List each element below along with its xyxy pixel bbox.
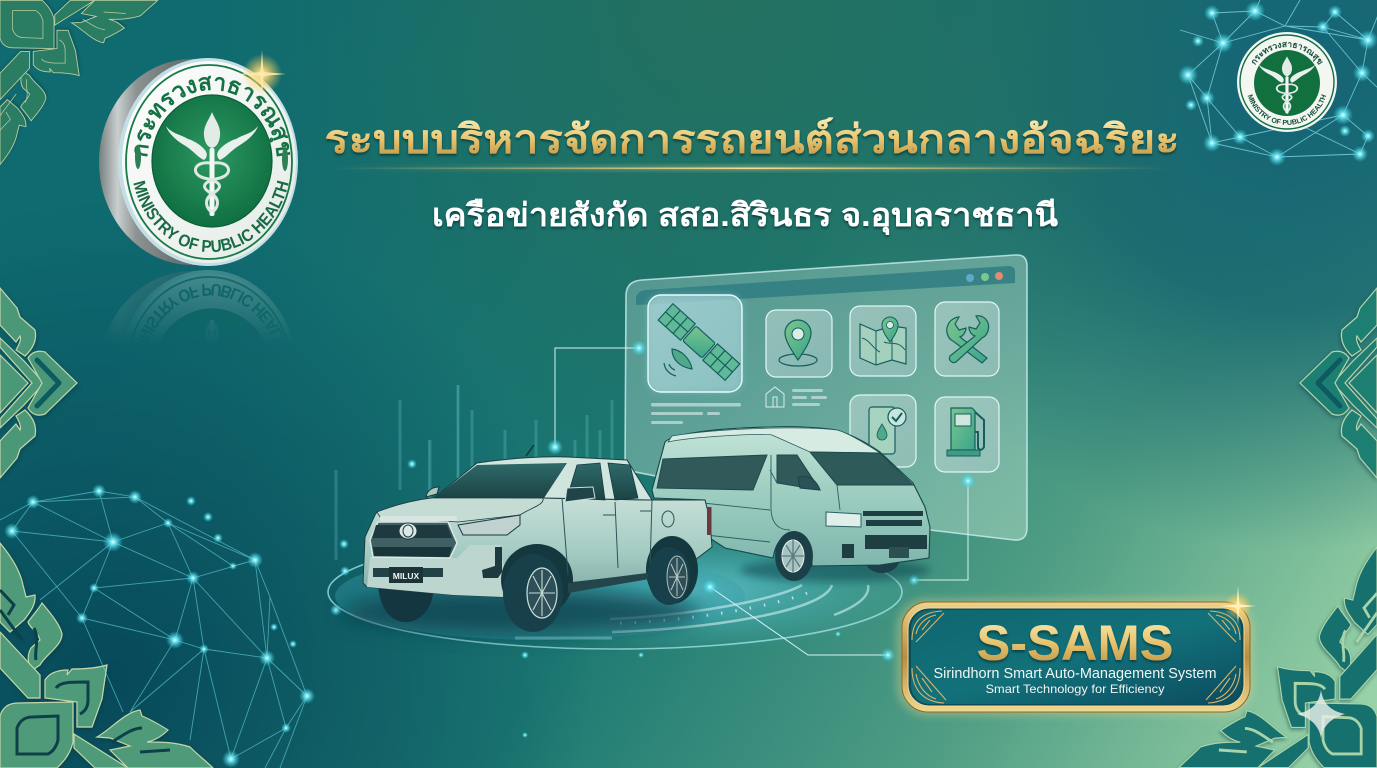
pickup body (363, 498, 712, 597)
logo: small ministry seal top-right: กระทรวงสาธารณสุข (1252, 42, 1323, 65)
icon: home (766, 387, 784, 407)
badge corner filigree (912, 611, 1240, 703)
badge panel (911, 610, 1241, 704)
pickup step bar (568, 572, 655, 593)
tile: location pin (766, 310, 832, 377)
van grille (842, 511, 927, 558)
vehicle: pickup truck (340, 445, 712, 634)
window controls (966, 272, 1003, 282)
pickup wheel arches (501, 536, 698, 616)
flare on coin (238, 50, 286, 98)
pickup side windows (567, 463, 638, 500)
ornament: bottom-right thai pattern (1179, 547, 1377, 768)
icon: sparkle watermark (1297, 690, 1345, 738)
pickup cabin (435, 457, 652, 500)
tile: fuel pump (935, 397, 999, 472)
dashboard panel (625, 255, 1027, 540)
van side window (657, 455, 767, 490)
coin (99, 58, 298, 266)
subtitle: เครือข่ายสังกัด สสอ.สิรินธร จ.อุบลราชธานี (432, 197, 1058, 236)
logo: ministry of public health coin (99, 50, 298, 334)
ornament: bottom-left thai pattern (0, 543, 213, 768)
ground ring (328, 530, 920, 650)
pickup mirrors (426, 487, 595, 502)
light streaks (336, 385, 612, 560)
logo: small ministry seal top-right (1237, 32, 1337, 132)
network: bottom-left (0, 484, 315, 768)
pickup number plate: MILUX (393, 571, 420, 581)
badge frame (902, 602, 1250, 712)
pickup bumper (367, 545, 508, 597)
ornament: top-left thai pattern (0, 0, 158, 165)
van body (652, 427, 930, 566)
pickup door lines (562, 498, 652, 575)
van mirror (798, 476, 820, 490)
tile: tools (935, 302, 999, 376)
badge: S-SAMS (896, 586, 1256, 716)
network: top-right (1178, 0, 1377, 166)
pickup antenna (526, 445, 534, 456)
van windshield (810, 452, 913, 485)
pickup grille (370, 516, 457, 558)
badge line two: Smart Technology for Efficiency (986, 682, 1164, 696)
logo: small ministry seal top-right: MINISTRY OF PUBLIC HEALTH (1248, 94, 1326, 125)
badge sparkle (1220, 586, 1256, 624)
pickup front wheel (503, 554, 563, 632)
panel title bar (636, 266, 1015, 305)
pickup lower grille strip (373, 568, 443, 577)
pickup tail light (707, 507, 712, 535)
title underline (330, 165, 1170, 171)
pickup fuel cap (662, 511, 674, 527)
pickup headlight (458, 515, 520, 535)
ornament: right middle thai pattern (1300, 288, 1377, 478)
pickup number plate (389, 567, 423, 583)
connector lines (555, 348, 968, 655)
van roof highlight (668, 428, 880, 453)
coin reflection (109, 270, 290, 334)
badge line one: Sirindhorn Smart Auto-Management System (934, 666, 1216, 682)
van details (655, 455, 840, 542)
pickup left front tyre (378, 585, 434, 622)
title: ระบบบริหารจัดการรถยนต์ส่วนกลางอัจฉริยะ (324, 117, 1180, 162)
van front wheel (864, 543, 900, 573)
badge heading: S-SAMS (976, 615, 1174, 671)
pickup hood (377, 498, 543, 522)
ornament: left middle thai pattern (0, 288, 77, 478)
pickup rear wheel (648, 547, 690, 605)
vehicle: van (652, 427, 930, 582)
pickup windshield (435, 463, 567, 498)
van headlight (826, 512, 861, 527)
tile: map (850, 306, 916, 376)
connector nodes (330, 340, 976, 738)
van door window (777, 455, 820, 490)
tile: phone fuel check (850, 395, 916, 467)
pickup fog lamp (482, 547, 502, 578)
tile: satellite (648, 295, 742, 392)
placeholder text lines (651, 389, 827, 424)
van rear wheel (775, 531, 813, 581)
panel body (625, 255, 1027, 540)
